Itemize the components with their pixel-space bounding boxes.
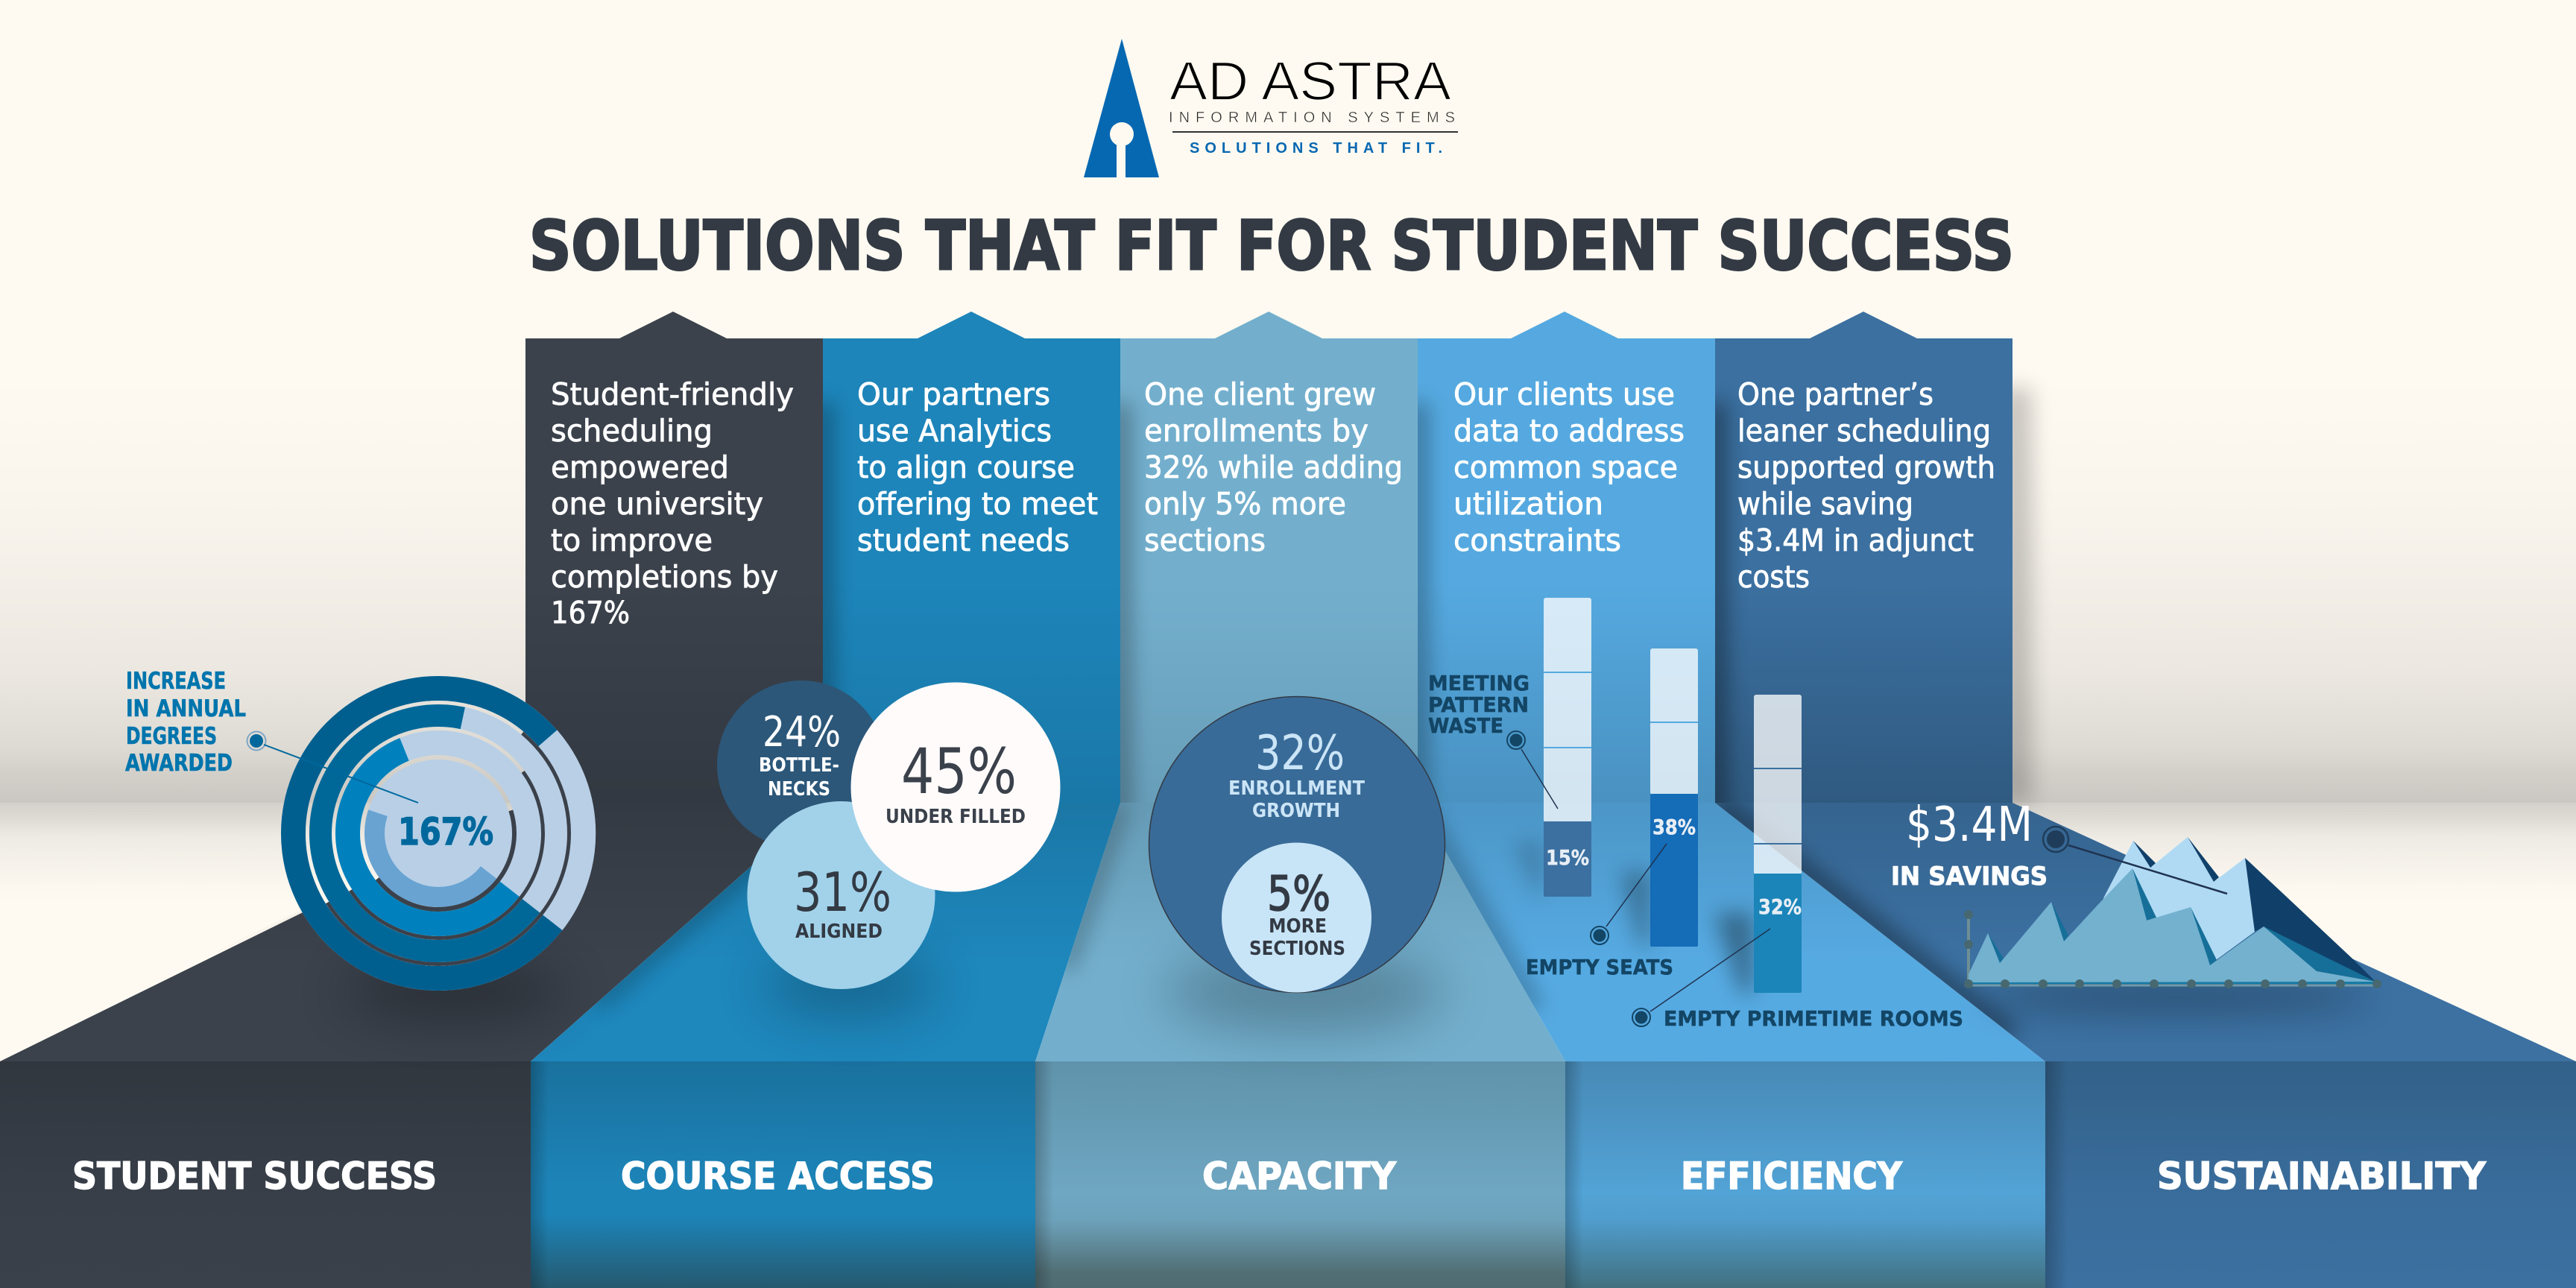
callout: increase in annual degrees awarded (125, 668, 418, 803)
icon: blue keyhole triangle (1084, 39, 1159, 177)
floor: course access (531, 803, 1120, 1061)
bubble: 5% more sections: 5% (1267, 867, 1330, 922)
text block: sustainability: One partner’s (1737, 376, 1933, 412)
bubble: 24% bottlenecks (717, 681, 886, 849)
chart: savings mountain area (1964, 837, 2381, 988)
callout: empty primetime rooms: EMPTY PRIMETIME ROOMS (1664, 1006, 1963, 1031)
panel: column walls (525, 312, 2012, 820)
band: capacity (1035, 1061, 1565, 1288)
axes (1969, 915, 2377, 985)
callout: $3.4M in savings: IN SAVINGS (1891, 862, 2048, 891)
text block: student success: 167% (551, 595, 630, 631)
text block: student success (551, 376, 794, 631)
text block: course access: to align course (857, 449, 1075, 485)
text block: capacity: One client grew (1144, 376, 1376, 412)
callout: meeting pattern waste: WASTE (1428, 713, 1503, 738)
bubble: 31% aligned (747, 801, 935, 989)
panel: capacity wall (1110, 312, 1418, 820)
text block: student success: one university (551, 486, 763, 522)
bubble: 24% bottlenecks: 24% (763, 708, 841, 757)
floor: capacity (1035, 803, 1565, 1061)
callout: $3.4M in savings: $3.4M (1906, 798, 2033, 853)
band: efficiency (1565, 1061, 2045, 1288)
floor: student success (0, 803, 823, 1061)
label: capacity: CAPACITY (1202, 1155, 1397, 1198)
text block: sustainability: costs (1737, 559, 1810, 595)
callout: increase in annual degrees awarded: INCREASE (126, 668, 226, 695)
chart: 167% radial donut (281, 676, 596, 991)
bubble: 32% enrollment growth: GROWTH (1252, 800, 1340, 822)
bubble: 5% more sections (1222, 842, 1371, 993)
label: efficiency: EFFICIENCY (1681, 1155, 1903, 1198)
text block: efficiency: common space (1453, 449, 1678, 485)
chart: efficiency bars (1428, 598, 1963, 1031)
bubble: 24% bottlenecks: BOTTLE- (759, 754, 839, 777)
bubble: 24% bottlenecks: NECKS (768, 778, 830, 801)
ring separators (307, 702, 569, 965)
text block: course access: student needs (857, 523, 1070, 558)
text block: capacity: 32% while adding (1144, 449, 1403, 485)
text block: efficiency: data to address (1453, 413, 1685, 449)
callout: empty primetime rooms (1632, 929, 1963, 1031)
bubble: 5% more sections: MORE (1269, 915, 1327, 938)
text block: capacity (1144, 376, 1403, 558)
bar: 38% empty seats: 38% (1652, 815, 1696, 839)
text block: efficiency: utilization (1453, 486, 1603, 522)
callout: increase in annual degrees awarded: IN ANNUAL (126, 695, 246, 722)
callout: $3.4M in savings (1891, 798, 2227, 894)
callout: meeting pattern waste: PATTERN (1428, 692, 1529, 717)
third ring (347, 742, 529, 924)
callout: increase in annual degrees awarded: AWARDED (125, 750, 233, 777)
panel: course access wall (812, 312, 1120, 820)
bubble: 5% more sections: SECTIONS (1249, 938, 1345, 960)
callout: meeting pattern waste: MEETING (1428, 671, 1530, 695)
floor: efficiency (1418, 803, 2045, 1061)
callout: increase in annual degrees awarded: DEGREES (126, 723, 217, 750)
text block: efficiency: constraints (1453, 523, 1621, 558)
back mountain (2103, 837, 2375, 982)
shadow: right side of last column (1998, 388, 2032, 803)
logo: Ad Astra (1084, 39, 1458, 177)
text block: student success: empowered (551, 449, 729, 485)
panel: column floors (0, 803, 2576, 1061)
callout: empty seats (1526, 844, 1673, 979)
text block: course access: Our partners (857, 376, 1050, 412)
bar: 32% empty primetime rooms (1754, 695, 1802, 993)
band: course access (531, 1061, 1035, 1288)
bubble: 45% under filled: UNDER FILLED (886, 806, 1026, 828)
bar: 32% empty primetime rooms: 32% (1758, 894, 1802, 919)
callout: empty seats: EMPTY SEATS (1526, 955, 1673, 979)
inner ring (374, 769, 502, 897)
text block: student success: completions by (551, 559, 778, 595)
text block: student success: Student-friendly (551, 376, 794, 412)
text block: course access: use Analytics (857, 413, 1052, 449)
bar: 15% meeting pattern waste: 15% (1546, 845, 1589, 870)
text block: sustainability (1737, 376, 1995, 595)
bubble: 32% enrollment growth (1149, 696, 1445, 993)
panel: efficiency wall (1407, 312, 1715, 820)
panel: student success wall (525, 312, 823, 803)
bubble: 32% enrollment growth: ENROLLMENT (1228, 777, 1365, 800)
logo tagline: SOLUTIONS THAT FIT. (1190, 140, 1442, 157)
value: 167%: 167% (398, 810, 493, 853)
label: student success: STUDENT SUCCESS (72, 1155, 437, 1198)
chart: capacity nested circles (1149, 696, 1445, 993)
chart: course access bubbles (717, 681, 1060, 989)
bubble: 45% under filled (851, 683, 1060, 891)
bubble: 31% aligned: ALIGNED (795, 921, 883, 943)
band: sustainability (2045, 1061, 2576, 1288)
text block: capacity: enrollments by (1144, 413, 1368, 449)
text block: student success: scheduling (551, 413, 713, 449)
text block: capacity: only 5% more (1144, 486, 1346, 522)
bar: 38% empty seats (1650, 648, 1698, 947)
axis ticks (1964, 910, 2381, 988)
text block: capacity: sections (1144, 523, 1266, 558)
text block: course access (857, 376, 1098, 558)
title: SOLUTIONS THAT FIT FOR STUDENT SUCCESS (529, 207, 2014, 285)
shadows under objects (343, 842, 2370, 1032)
label: sustainability: SUSTAINABILITY (2157, 1155, 2487, 1198)
text block: course access: offering to meet (857, 486, 1098, 522)
text block: sustainability: while saving (1737, 486, 1913, 522)
text block: efficiency (1453, 376, 1685, 558)
bubble: 31% aligned: 31% (794, 861, 891, 924)
label: course access: COURSE ACCESS (621, 1155, 935, 1198)
text block: sustainability: supported growth (1737, 449, 1995, 485)
outer ring (294, 689, 583, 978)
text block: sustainability: $3.4M in adjunct (1737, 523, 1974, 558)
text block: sustainability: leaner scheduling (1737, 413, 1991, 449)
logo subtitle: INFORMATION SYSTEMS (1169, 110, 1455, 126)
front mountain (1969, 868, 2375, 982)
floor: sustainability (1715, 803, 2576, 1061)
bubble: 45% under filled: 45% (901, 735, 1017, 808)
panel: sustainability wall (1705, 312, 2012, 820)
bubble: 32% enrollment growth: 32% (1255, 726, 1345, 781)
callout: meeting pattern waste (1428, 671, 1558, 809)
text block: efficiency: Our clients use (1453, 376, 1675, 412)
logo wordmark: AD ASTRA (1169, 51, 1451, 112)
panel: bottom label bands (0, 1061, 2576, 1288)
bar: 15% meeting pattern waste (1544, 598, 1591, 897)
band: student success (0, 1061, 531, 1288)
text block: student success: to improve (551, 523, 713, 558)
second ring (321, 716, 556, 951)
